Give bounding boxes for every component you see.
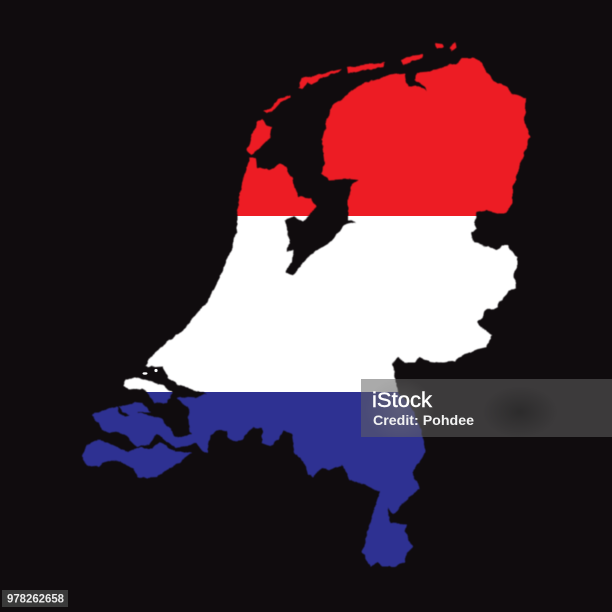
map: Netherlands filled with flag stripes <box>82 42 531 568</box>
flag stripe: red <box>236 42 531 216</box>
flag stripe: white <box>122 216 518 392</box>
small white islets near the delta <box>142 369 158 375</box>
image id label <box>2 590 68 607</box>
flag stripe: blue <box>82 392 426 568</box>
watermark banner <box>361 378 612 442</box>
watermark brand: iStock <box>372 388 432 412</box>
watermark credit: Credit: Pohdee <box>373 413 475 428</box>
image id label: 978262658 <box>7 594 65 606</box>
